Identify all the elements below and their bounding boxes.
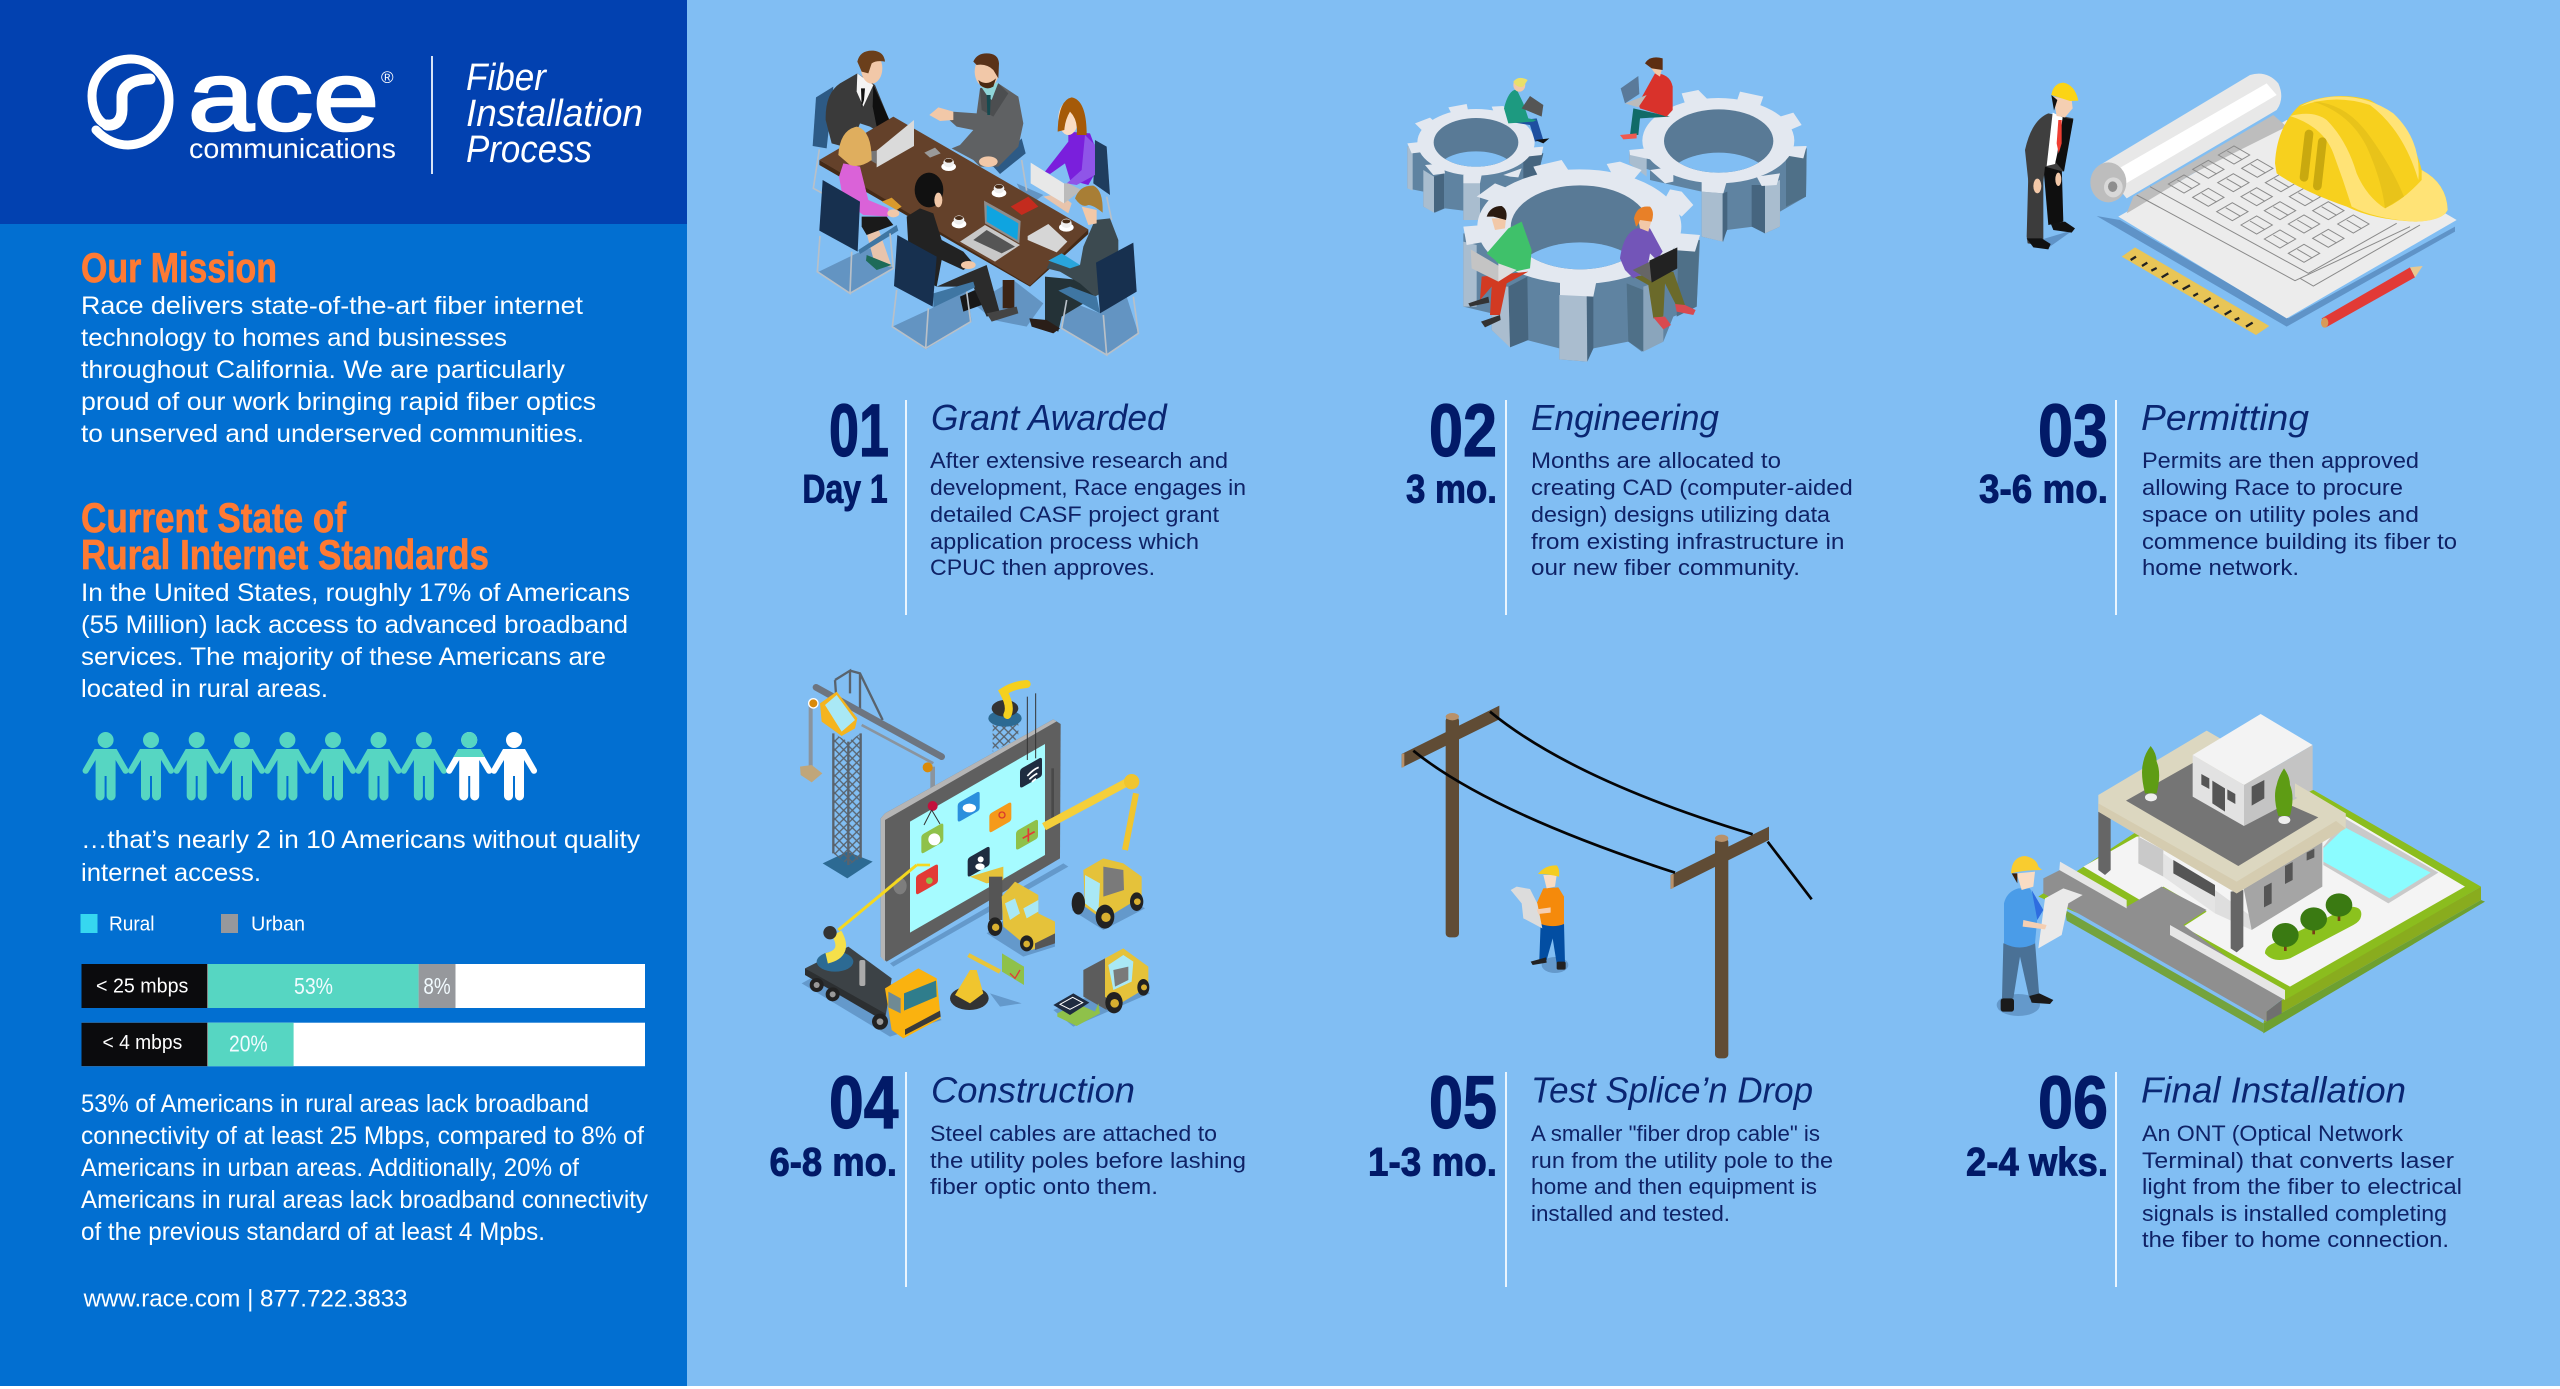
step 06: final installation: 2-4 wks. [1966,1141,2108,1185]
utility pole left [1402,706,1499,937]
heading: current state [81,494,489,578]
tablet [881,719,1061,962]
step 01: grant awarded: CPUC then approves. [930,555,1155,580]
bar: under 4 mbps: 20% [229,1031,268,1057]
panel: left sidebar [0,0,687,1386]
engineers [1468,57,1696,329]
step 02: engineering: Engineering [1531,397,1719,438]
rooftop plants [2142,746,2292,824]
bar: under 25 mbps: < 25 mbps [96,976,188,998]
step 06: final installation: An ONT (Optical Network [2142,1121,2404,1146]
step 01: grant awarded: After extensive research and [930,448,1228,473]
step 06: final installation: Terminal) that converts laser [2142,1148,2454,1173]
right gear [1629,90,1807,242]
header band with logo [0,0,687,224]
text block: mission [81,292,596,448]
bar: under 4 mbps: < 4 mbps [102,1032,182,1054]
step 06: final installation: Final Installation [2141,1070,2406,1111]
step 05: test splice and drop: run from the utility pole to the [1531,1148,1833,1173]
heading: our mission: Our Mission [81,244,277,291]
text block: statistics: 53% of Americans in rural areas lack broadband [81,1090,589,1118]
step 03: permitting: home network. [2142,555,2299,580]
step 04: construction: 04 [829,1061,898,1144]
step 05: test splice and drop: A smaller "fiber drop cable" is [1531,1121,1820,1146]
pool [2323,818,2438,903]
step 03: permitting: Permitting [2141,397,2309,438]
logo: race communications [92,41,396,164]
small gear [1407,104,1543,220]
step 05: test splice and drop: Test Splice’n Drop [1531,1070,1813,1111]
text block: current state: located in rural areas. [81,675,328,703]
text block: statistics: connectivity of at least 25 Mbps, compared to 8% of [81,1122,644,1150]
step 04: construction: Steel cables are attached to [930,1121,1217,1146]
bar: under 25 mbps: 8% [423,973,451,999]
text block: mission: technology to homes and businesses [81,324,507,352]
step 05: test splice and drop: 1-3 mo. [1368,1141,1497,1185]
text block: statistics: of the previous standard of at least 4 Mpbs. [81,1218,545,1246]
step 01: grant awarded: application process which [930,529,1199,554]
step 05: test splice and drop [1368,1061,1833,1287]
inspector with plans [1997,856,2083,1016]
worker with plans [1511,865,1568,973]
heading: current state: Rural Internet Standards [81,531,489,578]
legend: Rural [109,914,154,936]
pencil [2321,266,2423,328]
table [819,117,1088,308]
text block: mission: to unserved and underserved communities. [81,420,584,448]
lot base [2038,790,2485,1033]
bar: under 25 mbps [82,964,645,1008]
large gear [1463,160,1700,362]
step 04: construction: fiber optic onto them. [930,1174,1158,1199]
loader arm right [1044,774,1145,930]
step 05: test splice and drop: 05 [1429,1061,1497,1144]
forklift lower right [1053,948,1150,1027]
step 01: grant awarded: Grant Awarded [931,397,1168,438]
header title: Fiber [466,57,547,99]
step 03: permitting: Permits are then approved [2142,448,2419,473]
logo: race communications: ® [381,68,394,87]
step 05: test splice and drop: home and then equipment is [1531,1174,1817,1199]
step 06: final installation: 06 [2038,1061,2108,1144]
illustration: construction of tablet [800,671,1150,1038]
text block: statistics: Americans in urban areas. Additionally, 20% of [81,1154,579,1182]
text block: statistics [81,1090,648,1246]
step 01: grant awarded [802,389,1246,615]
step 05: test splice and drop: installed and tested. [1531,1201,1730,1226]
text block: mission: Race delivers state-of-the-art fiber internet [81,292,583,320]
logo: race communications: ace [188,41,379,151]
robot on tower [988,684,1027,752]
step 03: permitting [1979,389,2457,615]
app icons [916,757,1042,895]
step 03: permitting: allowing Race to procure [2142,475,2403,500]
small robot [950,953,1024,1010]
step 04: construction: the utility poles before lashing [930,1148,1246,1173]
header title: Installation [466,93,643,135]
step 01: grant awarded: detailed CASF project grant [930,502,1219,527]
illustration: meeting table [813,51,1138,355]
step 02: engineering: 3 mo. [1406,468,1497,512]
step 02: engineering: design) designs utilizing data [1531,502,1831,527]
step 04: construction: 6-8 mo. [770,1141,897,1185]
step 06: final installation: light from the fiber to electrical [2142,1174,2462,1199]
bar: under 25 mbps: 53% [294,973,333,999]
step 03: permitting: 3-6 mo. [1979,468,2108,512]
step 01: grant awarded: 01 [829,389,889,472]
heading: current state: Current State of [81,494,347,541]
person in hard hat [2025,83,2078,249]
text block: 2 in 10: internet access. [81,859,261,887]
step 04: construction: Construction [931,1070,1135,1111]
forklift middle [970,867,1055,957]
logo: race communications: communications [189,133,396,164]
text block: statistics: Americans in rural areas lack broadband connectivity [81,1186,648,1214]
step 06: final installation: signals is installed completing [2142,1201,2447,1226]
garden bushes [2265,893,2361,960]
step 02: engineering: Months are allocated to [1531,448,1781,473]
step 06: final installation [1966,1061,2462,1287]
step 02: engineering: our new fiber community. [1531,555,1800,580]
step 03: permitting: 03 [2038,389,2108,472]
header title: Process [466,129,592,171]
house [2098,714,2346,952]
bar chart: broadband [82,964,645,1066]
hard hat [2275,96,2448,222]
bar: under 4 mbps [82,1023,645,1066]
flatbed truck [802,865,942,1038]
text block: current state: (55 Million) lack access to advanced broadband [81,611,628,639]
step 03: permitting: commence building its fiber to [2142,529,2457,554]
text block: mission: throughout California. We are particularly [81,356,566,384]
step 06: final installation: the fiber to home connection. [2142,1227,2449,1252]
text block: current state [81,579,630,703]
step 03: permitting: space on utility poles and [2142,502,2419,527]
step 04: construction [770,1061,1246,1287]
legend [80,914,305,936]
footer contact: www.race.com | 877.722.3833 [83,1286,408,1312]
step 02: engineering [1406,389,1853,615]
step 02: engineering: creating CAD (computer-aided [1531,475,1853,500]
text block: current state: services. The majority of these Americans are [81,643,606,671]
step 01: grant awarded: Day 1 [802,468,888,512]
illustration: plans and hard hat [2025,74,2457,335]
blueprint sheet [2118,115,2457,318]
paper roll [2090,74,2281,202]
text block: 2 in 10: …that’s nearly 2 in 10 Americans without quality [81,826,641,854]
fiber cables [1413,712,1812,899]
utility pole right [1671,827,1769,1058]
text block: current state: In the United States, roughly 17% of Americans [81,579,630,607]
legend: Urban [251,914,305,936]
tower crane [800,671,942,878]
ruler [2122,247,2269,335]
illustration: utility poles and worker [1402,706,1812,1058]
pictogram: ten people [83,732,537,800]
illustration: finished house [1997,714,2485,1033]
text block: mission: proud of our work bringing rapid fiber optics [81,388,596,416]
illustration: gears and engineers [1407,57,1807,362]
step 01: grant awarded: development, Race engages in [930,475,1246,500]
step 02: engineering: from existing infrastructure in [1531,529,1844,554]
header title [466,57,643,171]
step 02: engineering: 02 [1429,389,1497,472]
text block: 2 in 10 [81,826,641,887]
